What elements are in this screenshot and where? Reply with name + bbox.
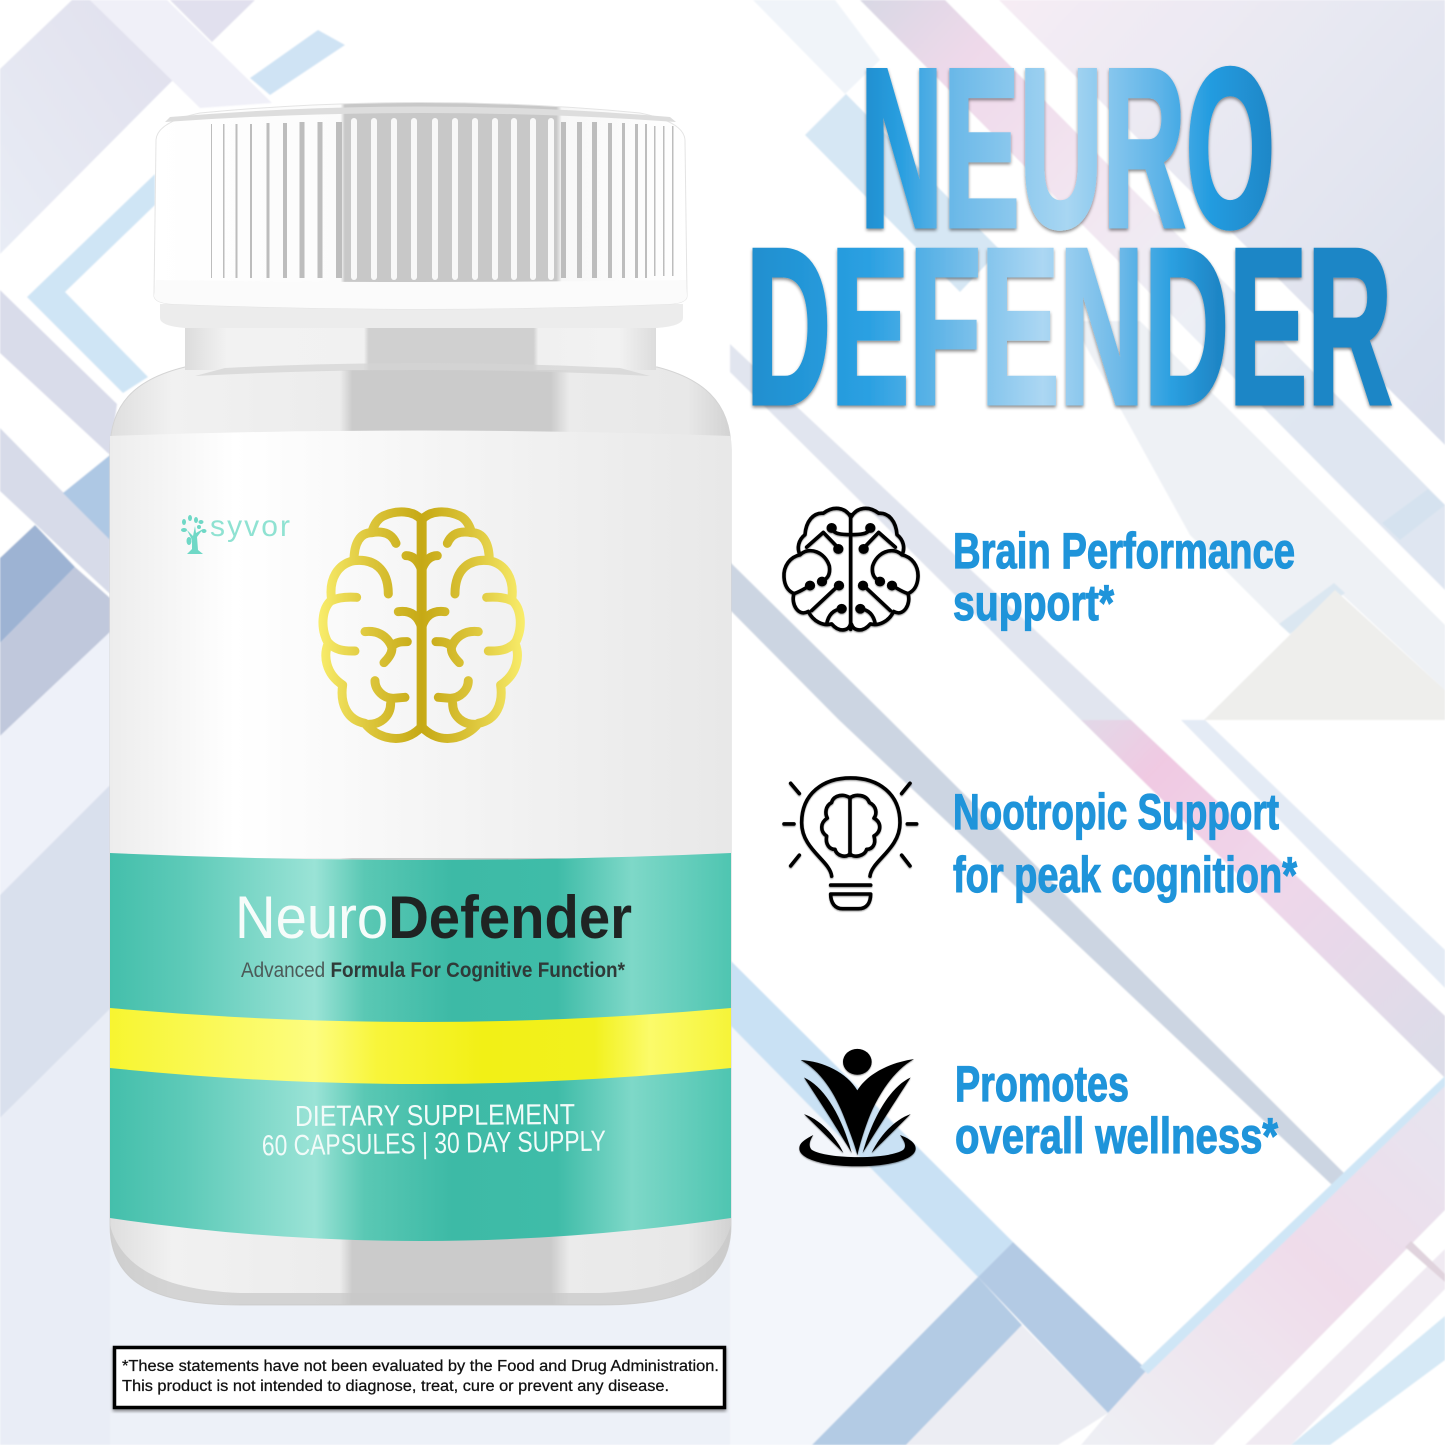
bottle cap [154, 102, 687, 309]
label: teal band [110, 853, 731, 1241]
neck ring [160, 304, 683, 328]
disclaimer box: This product is not intended to diagnose, treat, cure or prevent any disease. [122, 1378, 669, 1395]
icon: light bulb with brain [784, 778, 917, 909]
title [746, 21, 1392, 451]
benefit 1 text: support* [953, 575, 1114, 631]
bottle body [110, 367, 731, 1305]
disclaimer box: *These statements have not been evaluated by the Food and Drug Administration. [122, 1358, 719, 1375]
benefit 2 text [953, 784, 1297, 903]
disclaimer box [114, 1348, 724, 1408]
product name: NeuroDefender [235, 884, 632, 951]
benefit 3 text [955, 1056, 1278, 1164]
bottom rim shading [110, 1225, 731, 1305]
icon: gold brain [323, 512, 520, 738]
label: white panel [110, 430, 731, 858]
bottle neck [185, 318, 656, 370]
text: syvor: syvor [210, 510, 290, 543]
supplement facts [262, 1099, 606, 1162]
cap ribs [211, 122, 674, 278]
benefit 3 text: overall wellness* [955, 1108, 1278, 1164]
benefit 2 text: Nootropic Support [953, 784, 1279, 840]
supplement facts: 60 CAPSULES | 30 DAY SUPPLY [262, 1126, 606, 1162]
brand logo: syvor [181, 510, 290, 554]
benefit 2 text: for peak cognition* [953, 847, 1297, 903]
benefit 1 text [953, 523, 1295, 631]
label: yellow stripe [110, 1008, 731, 1084]
benefit 3 text: Promotes [955, 1056, 1129, 1112]
product bottle [110, 102, 731, 1305]
benefit 1 text: Brain Performance [953, 523, 1295, 579]
icon: circuit brain [784, 508, 918, 630]
supplement facts: DIETARY SUPPLEMENT [295, 1099, 575, 1133]
tagline: Advanced Formula For Cognitive Function* [241, 959, 626, 982]
icon: tree [181, 515, 206, 554]
icon: wellness figure [799, 1049, 916, 1166]
